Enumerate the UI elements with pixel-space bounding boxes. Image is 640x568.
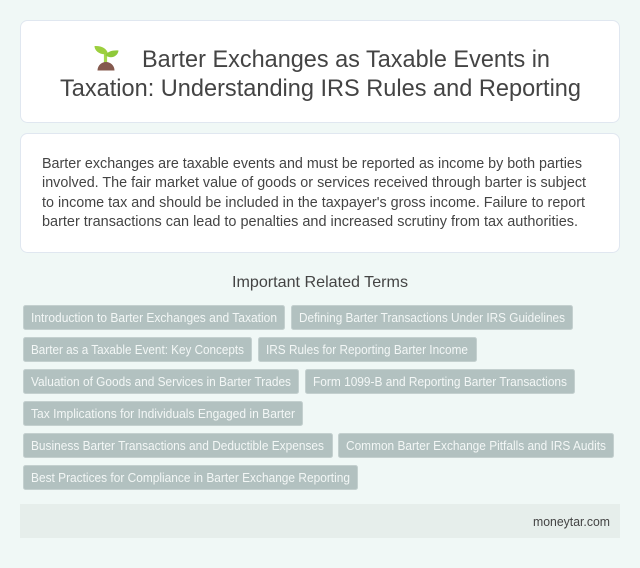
footer source: moneytar.com <box>533 514 610 529</box>
tag: Defining Barter Transactions Under IRS Guidelines <box>299 311 565 325</box>
description text <box>42 156 586 230</box>
footer bar <box>20 504 620 538</box>
tag <box>24 466 358 490</box>
tag <box>24 434 332 458</box>
tag <box>24 338 252 362</box>
tag: Valuation of Goods and Services in Barter Trades <box>31 375 291 389</box>
tag: Form 1099-B and Reporting Barter Transactions <box>313 375 567 389</box>
tag: Common Barter Exchange Pitfalls and IRS Audits <box>346 439 606 453</box>
description text: to income tax and should be included in the taxpayer's gross income. Failure to report <box>42 195 585 211</box>
icon: seedling <box>94 46 118 70</box>
heading: related terms: Important Related Terms <box>232 274 408 291</box>
panel: description <box>20 134 620 252</box>
panel: title card <box>20 20 620 122</box>
tag <box>258 338 476 362</box>
title line 2: Taxation: Understanding IRS Rules and Reporting <box>60 75 581 102</box>
tag: Best Practices for Compliance in Barter Exchange Reporting <box>31 471 350 485</box>
tag: Barter as a Taxable Event: Key Concepts <box>31 343 244 357</box>
description text: Barter exchanges are taxable events and must be reported as income by both parties <box>42 156 582 172</box>
tag: IRS Rules for Reporting Barter Income <box>266 343 468 357</box>
description text: involved. The fair market value of goods or services received through barter is subject <box>42 175 586 191</box>
tag: Business Barter Transactions and Deductible Expenses <box>31 439 324 453</box>
tag <box>292 306 572 330</box>
tag <box>24 370 298 394</box>
tag: Introduction to Barter Exchanges and Taxation <box>31 311 277 325</box>
description text: barter transactions can lead to penalties and increased scrutiny from tax authorities. <box>42 214 578 230</box>
tag <box>306 370 574 394</box>
tag <box>24 402 302 426</box>
title line 1: Barter Exchanges as Taxable Events in <box>142 46 550 73</box>
tag list <box>24 306 614 490</box>
tag <box>24 306 284 330</box>
tag <box>338 434 614 458</box>
tag: Tax Implications for Individuals Engaged in Barter <box>31 407 295 421</box>
